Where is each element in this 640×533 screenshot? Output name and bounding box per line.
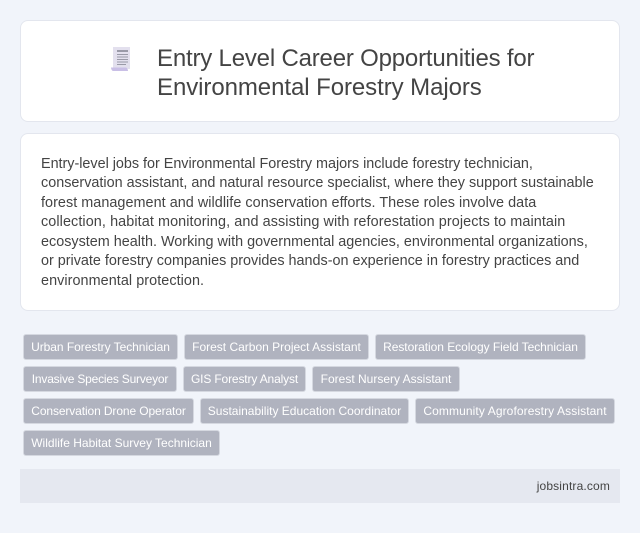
tag list: Forest Carbon Project Assistant	[192, 340, 361, 354]
tag list: Forest Nursery Assistant	[321, 372, 451, 386]
tag list: Conservation Drone Operator	[31, 404, 186, 418]
text block: description: Entry-level jobs for Environmental Forestry majors include forestry technician,	[41, 156, 533, 172]
text block: description: ecosystem health. Working with governmental agencies, environmental organizations,	[41, 234, 588, 250]
text block: description: collection, habitat monitoring, and assisting with reforestation projects to maintain	[41, 214, 565, 230]
tag list: Invasive Species Surveyor	[32, 372, 168, 386]
text block: description	[41, 156, 594, 289]
text block: description: forest management and wildlife conservation efforts. These roles involve data	[41, 195, 536, 211]
text block: description: conservation assistant, and natural resource specialist, where they support sustainable	[41, 175, 594, 191]
panel: title card	[20, 20, 620, 122]
tag list: Community Agroforestry Assistant	[423, 404, 607, 418]
icon: document scroll	[111, 47, 130, 71]
text block: description: or private forestry companies provides hands-on experience in forestry practices and	[41, 253, 579, 269]
tag list: Urban Forestry Technician	[31, 340, 170, 354]
footer text: source: jobsintra.com	[537, 479, 610, 493]
heading: Entry Level Career Opportunities for	[157, 45, 534, 72]
tag list: Restoration Ecology Field Technician	[383, 340, 578, 354]
tag list: GIS Forestry Analyst	[191, 372, 298, 386]
heading	[157, 45, 534, 101]
panel: description card	[20, 133, 620, 311]
text block: description: environmental protection.	[41, 273, 204, 289]
heading: Environmental Forestry Majors	[157, 74, 482, 101]
tag list	[23, 334, 615, 456]
footer	[20, 469, 620, 503]
tag list: Wildlife Habitat Survey Technician	[31, 436, 212, 450]
tag list: Sustainability Education Coordinator	[208, 404, 401, 418]
